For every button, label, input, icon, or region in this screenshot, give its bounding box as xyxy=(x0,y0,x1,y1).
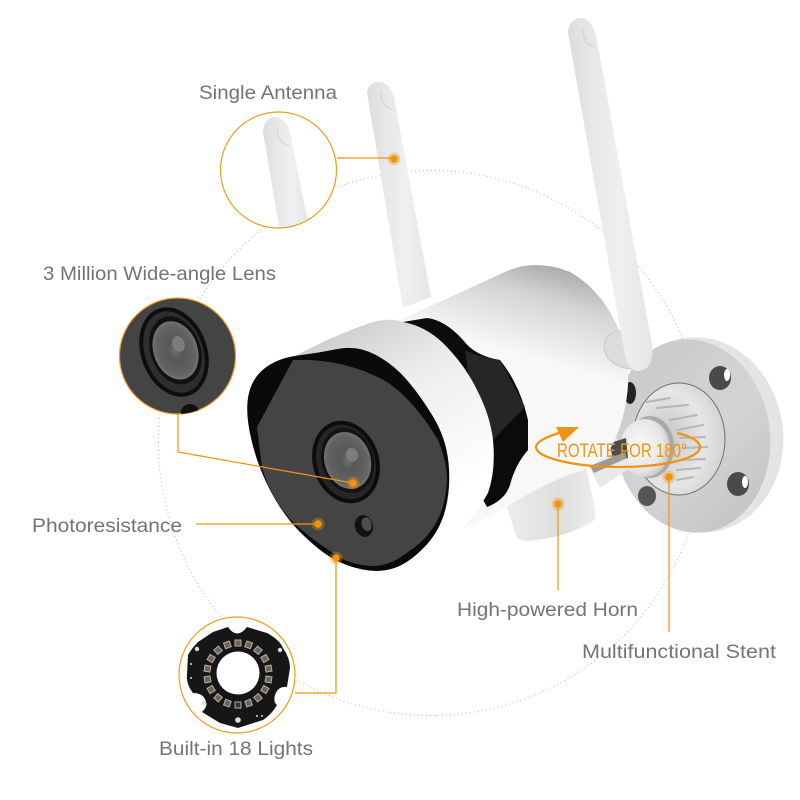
icon: screw hole right xyxy=(727,472,749,496)
callout: single antenna xyxy=(199,82,400,232)
camera face xyxy=(247,348,449,571)
horn housing xyxy=(507,466,596,541)
photoresistor xyxy=(352,513,376,539)
label: Multifunctional Stent xyxy=(582,641,777,663)
LED circuit board xyxy=(187,627,290,728)
inset circle: LED board xyxy=(179,617,295,733)
bracket: wall plate xyxy=(601,326,796,544)
dotted orbit circle xyxy=(158,170,704,716)
marker dot xyxy=(552,498,564,510)
callout: photoresistance xyxy=(32,515,324,537)
ring highlight xyxy=(465,350,525,440)
label: Single Antenna xyxy=(199,82,337,104)
callout: built-in lights xyxy=(159,552,342,760)
marker dot xyxy=(312,518,324,530)
marker dot xyxy=(388,152,400,166)
icon: screw hole lower left xyxy=(638,486,656,506)
marker dot xyxy=(330,552,342,564)
label: High-powered Horn xyxy=(457,599,638,621)
LEDs ring xyxy=(204,640,272,708)
inset circle: antenna tip xyxy=(220,112,336,232)
callout: wide-angle lens xyxy=(43,263,360,490)
label: Built-in 18 Lights xyxy=(159,738,313,760)
camera body xyxy=(295,265,628,574)
label: Photoresistance xyxy=(32,515,182,537)
black rear ring xyxy=(403,318,528,507)
antenna: rear with hinge xyxy=(568,18,652,371)
icon: screw hole top xyxy=(709,366,731,390)
dark grey front panel xyxy=(257,360,447,566)
bracket stem xyxy=(585,436,630,488)
callout: multifunctional stent xyxy=(582,470,777,663)
rotate indicator: ROTATE FOR 180° xyxy=(557,440,687,462)
black front rim xyxy=(247,348,449,571)
antenna: middle xyxy=(367,82,431,308)
ridged mount xyxy=(633,383,725,495)
callout: high-powered horn xyxy=(457,498,638,621)
label: 3 Million Wide-angle Lens xyxy=(43,263,276,285)
lens xyxy=(302,412,390,512)
ball joint xyxy=(620,416,674,478)
icon: screw hole behind body xyxy=(624,382,636,404)
marker dot xyxy=(346,476,360,490)
inset circle: lens close-up xyxy=(120,297,236,420)
marker dot xyxy=(662,470,676,484)
white front band xyxy=(295,320,494,574)
rotate indicator xyxy=(536,427,700,467)
